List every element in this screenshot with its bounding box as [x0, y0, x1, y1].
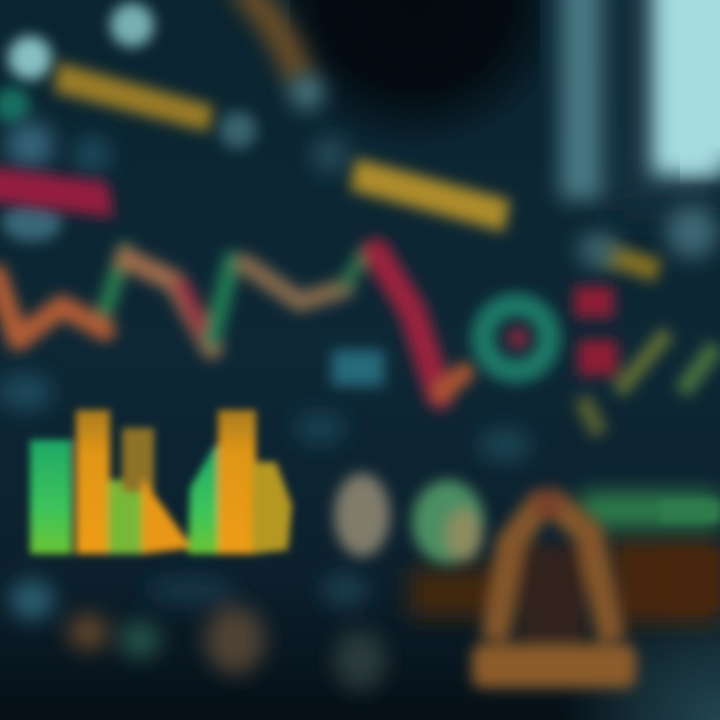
brown arc, top centre: [240, 0, 324, 109]
donut ring: [483, 305, 549, 371]
pale coin: [334, 473, 390, 557]
small teal tile, centre: [332, 350, 384, 386]
green and tan coin: [412, 480, 484, 564]
window light, top right: [560, 0, 720, 258]
pale dots, top left: [0, 3, 348, 242]
yellow label bar, upper left: [54, 62, 214, 132]
small icons row, lower left: [10, 574, 386, 690]
wooden table, lower right: [410, 492, 720, 623]
red bar, left: [0, 165, 114, 218]
candlesticks, right: [574, 286, 716, 434]
wooden balance scale: [472, 488, 636, 688]
muted blue dots, middle row: [0, 232, 618, 461]
yellow label, right: [600, 242, 662, 282]
line chart: [0, 250, 465, 396]
bar chart: [30, 410, 292, 554]
yellow label bar, centre: [350, 158, 510, 232]
